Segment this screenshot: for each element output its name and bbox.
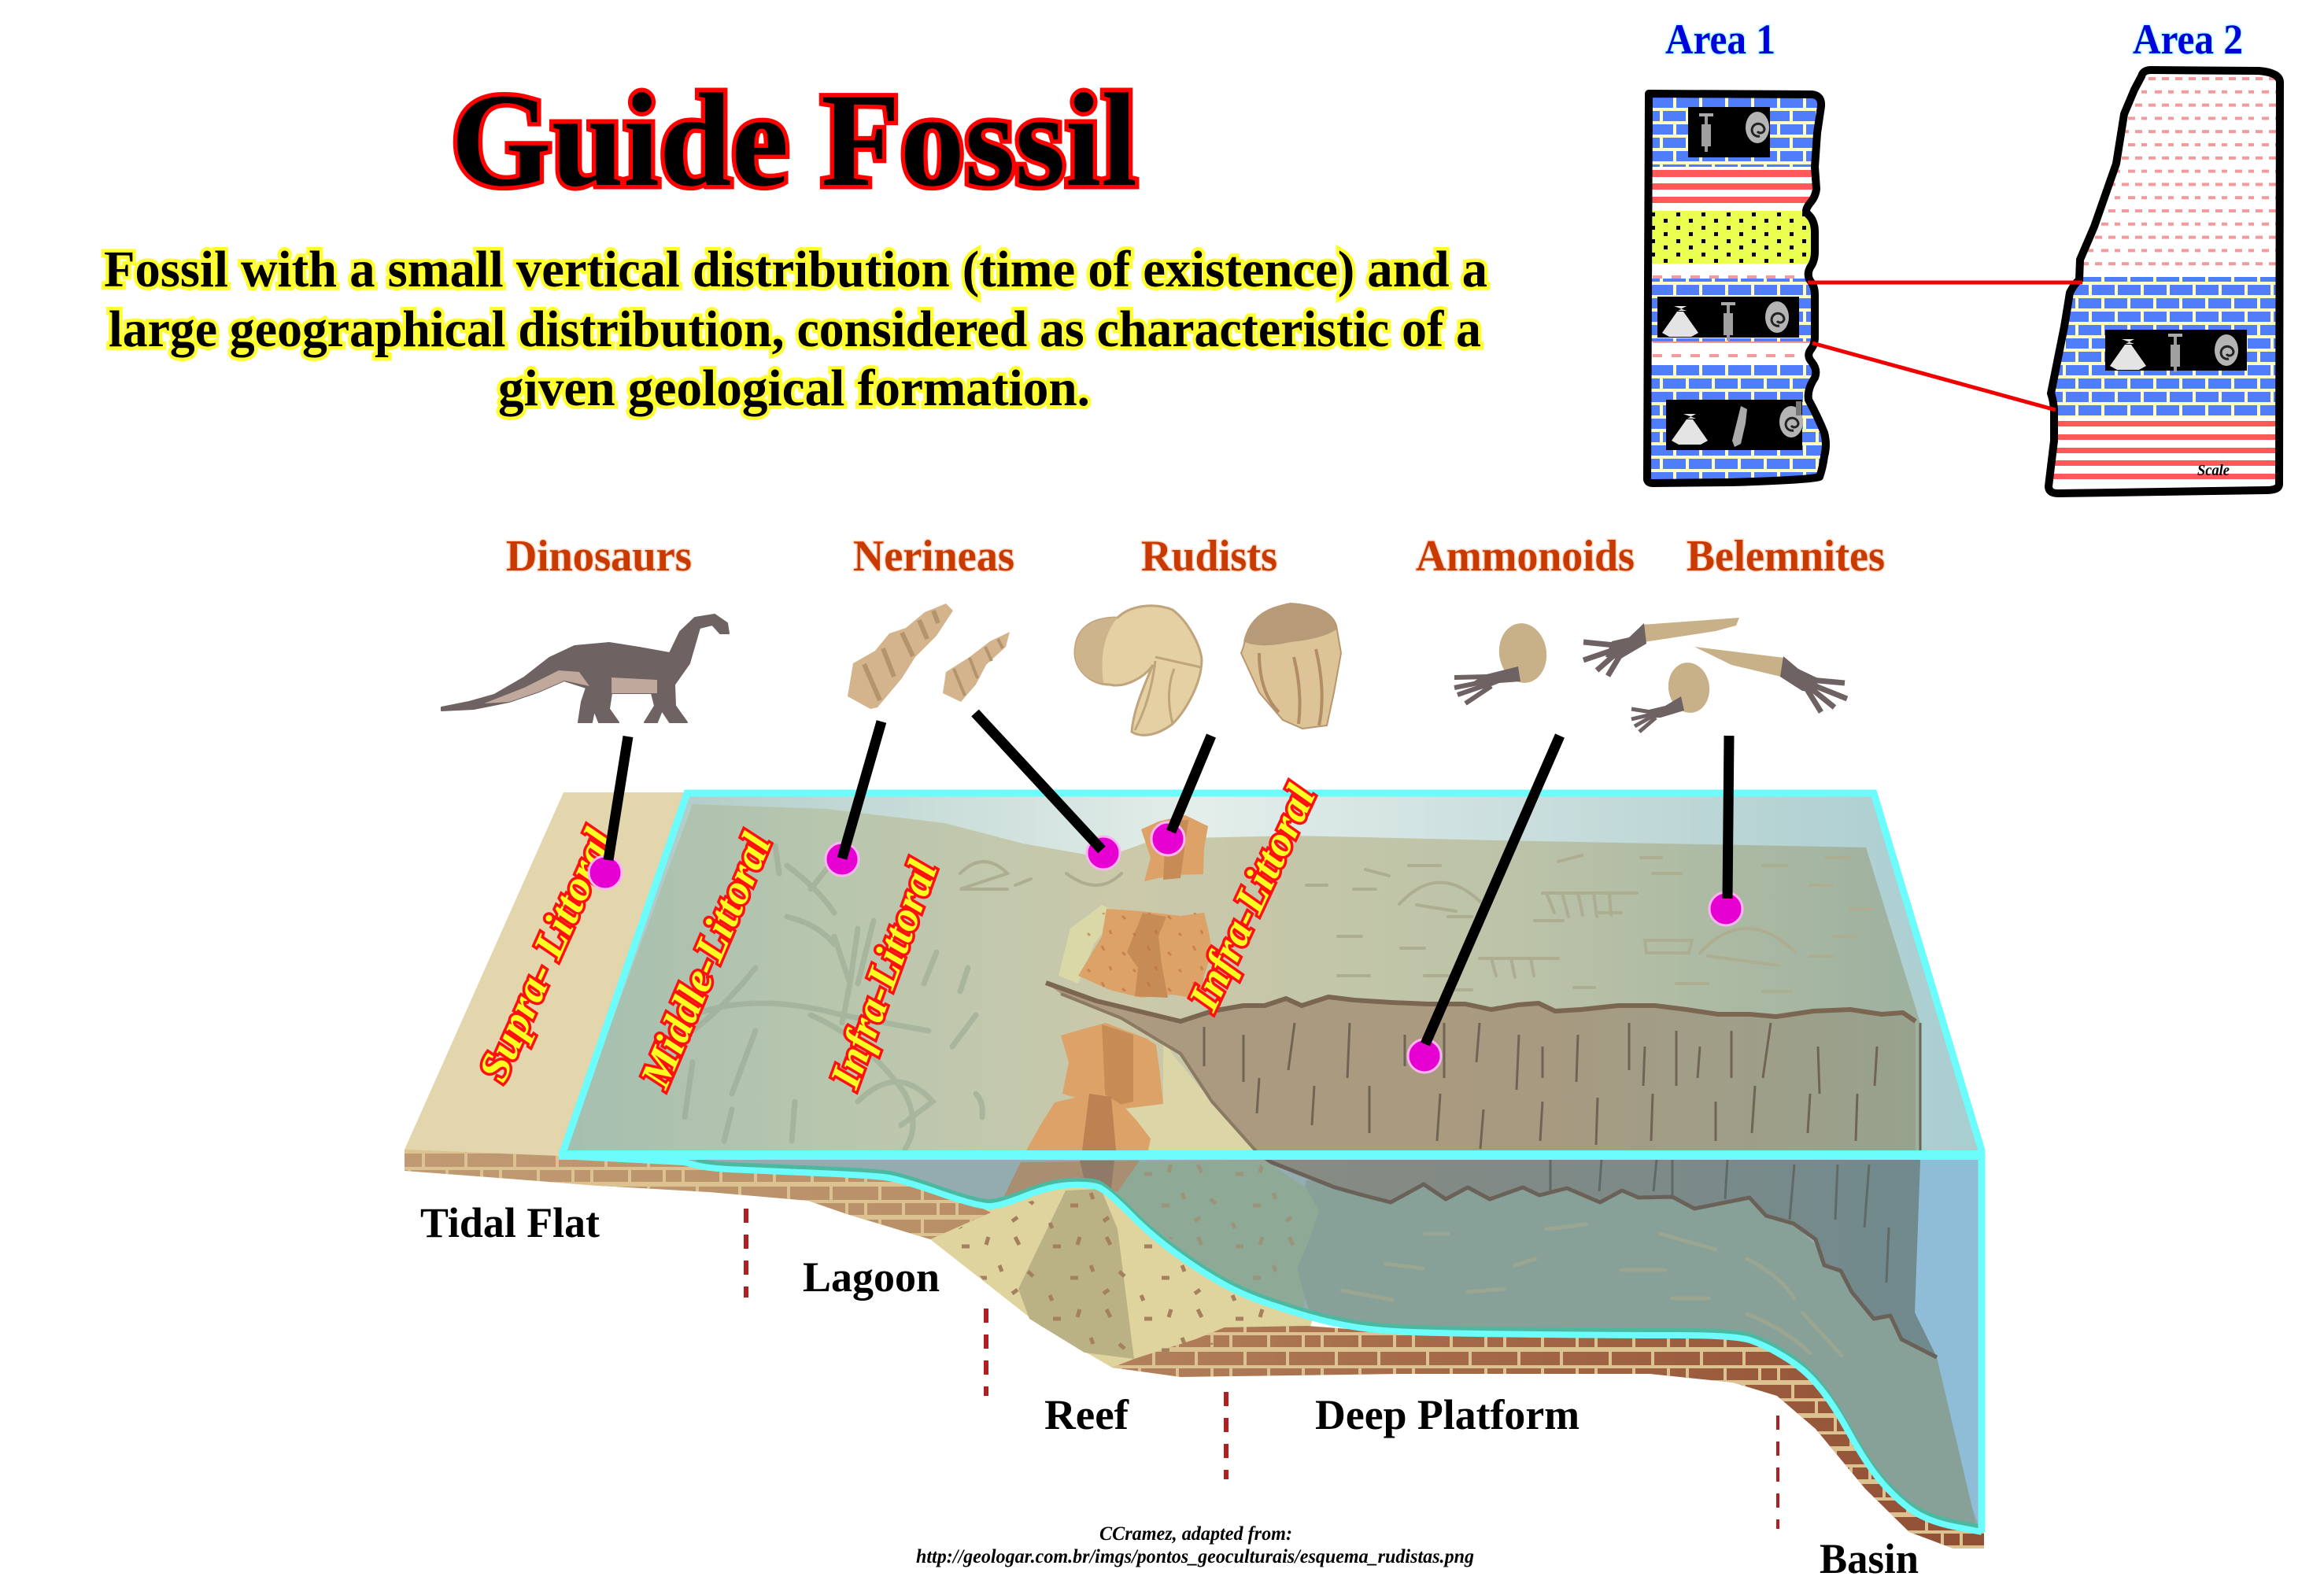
label: nerineas: Nerineas <box>853 532 1014 581</box>
title: Guide Fossil <box>451 66 1137 214</box>
marker: ammonoids <box>1408 736 1560 1072</box>
definition text: given geological formation. <box>498 360 1090 417</box>
label: reef: Reef <box>1044 1391 1129 1438</box>
zone divider: tidal flat / lagoon <box>744 1209 748 1298</box>
marker: belemnites <box>1709 736 1742 925</box>
reef patch: bottom <box>1026 1092 1151 1150</box>
zone divider: lagoon / reef <box>984 1309 988 1396</box>
icon: ammonoids and belemnites <box>1454 618 1847 732</box>
heading: area 2: Area 2 <box>2133 16 2243 63</box>
definition text: Fossil with a small vertical distribution (time of existence) and a <box>104 241 1487 298</box>
front face: submerged slope <box>1259 1160 1937 1357</box>
fossil box 1 <box>1688 107 1770 157</box>
seabed trace fossils <box>960 855 1873 991</box>
reef core wedge <box>1018 1189 1134 1359</box>
scale label: Scale <box>2197 462 2230 479</box>
water surface, far side <box>560 792 1982 1150</box>
marker: rudists <box>1151 736 1211 855</box>
front face: reef body <box>1002 1161 1140 1201</box>
label: dinosaurs: Dinosaurs <box>506 532 692 581</box>
tidal flat surface <box>405 792 693 1156</box>
label: middle-littoral: Middle-Littoral <box>630 827 780 1095</box>
marker: nerineas left <box>826 722 881 876</box>
icon: rudist 2 <box>1241 604 1341 729</box>
water curve <box>560 1156 1982 1532</box>
sediment strata <box>405 1150 1984 1549</box>
water box outline <box>562 793 1982 1532</box>
correlation line: lower <box>1812 343 2056 410</box>
platform edge and deep surface <box>1046 983 1916 1160</box>
label: lagoon: Lagoon <box>803 1253 940 1301</box>
credit: http://geologar.com.br/imgs/pontos_geoculturais/esquema_rudistas.png <box>916 1546 1474 1567</box>
icon: nerinea shells <box>848 604 1010 709</box>
icon: dinosaur <box>442 615 729 722</box>
zone divider: deep platform / basin <box>1776 1416 1779 1529</box>
marker: dinosaurs <box>589 736 628 889</box>
floor ripple marks <box>1342 1224 1842 1356</box>
front face: deep blue margin <box>1915 1160 1982 1532</box>
definition text: large geographical distribution, considered as characteristic of a <box>109 301 1481 358</box>
area 1 layers <box>1645 98 1831 480</box>
platform flank outline <box>1061 994 1263 1159</box>
label: belemnites: Belemnites <box>1687 532 1885 581</box>
reef specks <box>944 1184 1307 1361</box>
panel: area 2 stratigraphic column <box>2046 16 2280 493</box>
reef patch: upper middle <box>1078 909 1212 999</box>
credit <box>916 1523 1474 1567</box>
label: supra-littoral: Supra- Littoral <box>469 821 623 1088</box>
label: deep platform: Deep Platform <box>1315 1391 1580 1438</box>
reef halo <box>1059 905 1267 1155</box>
label: ammonoids: Ammonoids <box>1416 532 1635 581</box>
fossil box 4 <box>2105 330 2247 372</box>
front face: slope outline <box>1263 1159 1937 1357</box>
platform slope lines <box>1204 1023 1920 1157</box>
icon: rudist 1 <box>1075 606 1202 735</box>
front face: reef seen through water <box>1107 1159 1319 1312</box>
block diagram: carbonate platform <box>405 792 1985 1549</box>
area 2 layers <box>2046 76 2279 479</box>
front face: submerged slope lines <box>1550 1160 1889 1283</box>
reef sand deposits <box>930 1184 1313 1369</box>
marker: nerineas right <box>975 713 1120 869</box>
water curve shadow <box>696 1161 1982 1527</box>
heading: area 1: Area 1 <box>1665 16 1775 63</box>
area 1 outline <box>1647 94 1826 483</box>
platform edge outline <box>1046 983 1916 1021</box>
front face: platform floor <box>1291 1180 1977 1528</box>
label: infra-littoral right: Infra-Littoral <box>1179 778 1325 1018</box>
area 2 outline <box>2049 70 2280 493</box>
label: tidal flat: Tidal Flat <box>420 1199 600 1246</box>
panel: area 1 stratigraphic column <box>1645 16 1831 483</box>
correlation line: upper <box>1808 280 2082 285</box>
definition text <box>104 241 1487 417</box>
fossil box 3 <box>1666 400 1803 450</box>
label: rudists: Rudists <box>1141 532 1277 581</box>
seabed surface <box>564 804 1920 1150</box>
water box front edge <box>559 1150 1985 1160</box>
fossil box 2 <box>1657 297 1799 341</box>
credit: CCramez, adapted from: <box>1099 1523 1292 1545</box>
reef patch: lower middle <box>1061 1023 1163 1109</box>
label: infra-littoral left: Infra-Littoral <box>821 855 947 1095</box>
zone divider: reef / deep platform <box>1224 1392 1229 1479</box>
front face: water <box>560 1150 1982 1532</box>
reef patch: top <box>1141 815 1208 881</box>
